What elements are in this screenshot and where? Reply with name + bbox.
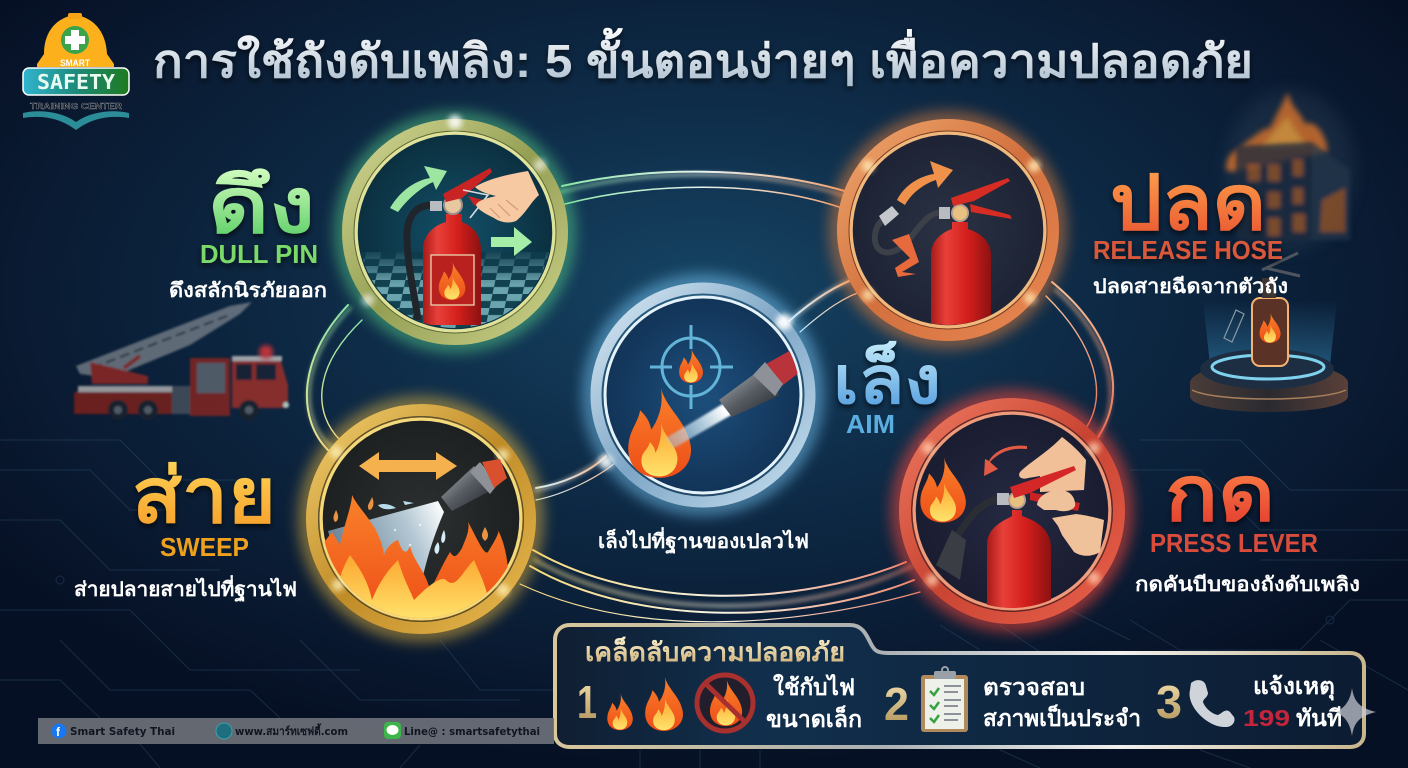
step: press lever (red) <box>900 399 1124 623</box>
website contact: www.สมาร์ทเซฟตี้.com <box>235 723 348 738</box>
english: DULL PIN: DULL PIN <box>200 239 318 269</box>
label: release <box>1093 161 1288 298</box>
website contact <box>216 723 348 739</box>
facebook contact: Smart Safety Thai <box>70 725 175 738</box>
tip 1: 1 <box>577 676 597 728</box>
checker floor <box>361 252 549 328</box>
decorative sparkle <box>1336 688 1376 736</box>
tip 3 <box>1156 673 1342 731</box>
label: aim <box>598 340 941 555</box>
tip 3: 3 <box>1156 676 1182 728</box>
safety banner: SAFETY <box>37 70 115 94</box>
icon: open book <box>23 111 129 130</box>
english: SWEEP: SWEEP <box>160 532 249 562</box>
heading: กด: กด <box>1165 452 1275 537</box>
facebook contact <box>52 724 175 739</box>
icon: large flame <box>628 388 691 478</box>
tip 2: สภาพเป็นประจำ <box>983 703 1141 731</box>
description: กดคันบีบของถังดับเพลิง <box>1135 573 1360 596</box>
icon: clipboard <box>921 667 968 732</box>
tip 1 <box>577 673 862 732</box>
tip 3: 199 <box>1243 705 1290 731</box>
logo: Smart Safety Training Center <box>23 13 129 130</box>
icon: hard hat: SMART <box>60 58 90 68</box>
icon: flame <box>920 458 966 522</box>
arrow: curved <box>390 166 447 212</box>
description: ส่ายปลายสายไปที่ฐานไฟ <box>74 574 297 603</box>
icon: nozzle hose <box>482 459 507 488</box>
arrow: straight <box>491 227 532 256</box>
icon: small flame <box>679 349 703 383</box>
arrow: double-headed <box>359 452 457 480</box>
icon: flames and spray <box>318 495 509 620</box>
ring <box>307 405 535 633</box>
label: press <box>1135 452 1360 596</box>
line contact <box>384 722 540 739</box>
label: sweep <box>74 454 297 603</box>
description: ปลดสายฉีดจากตัวถัง <box>1093 275 1288 298</box>
icon: nozzle and spray <box>666 350 800 448</box>
illustration: burning building <box>1225 90 1355 250</box>
step: aim (blue) <box>591 283 815 507</box>
english: PRESS LEVER: PRESS LEVER <box>1150 528 1318 558</box>
step: pull pin (green) <box>343 115 567 344</box>
icon: target crosshair <box>650 325 733 409</box>
line contact: Line@ : smartsafetythai <box>404 725 540 738</box>
description: ดึงสลักนิรภัยออก <box>169 280 327 302</box>
heading: ส่าย: ส่าย <box>132 454 276 539</box>
tip 1: ขนาดเล็ก <box>766 704 862 732</box>
tips heading: เคล็ดลับความปลอดภัย <box>585 636 845 667</box>
icon: nozzle <box>441 466 492 511</box>
illustration: hologram extinguisher on platform <box>1190 253 1348 412</box>
tip 1: ใช้กับไฟ <box>773 673 855 700</box>
arrow: curved <box>897 161 953 205</box>
icon: extinguisher with released hose <box>875 178 1012 330</box>
icon: big flame <box>645 677 683 731</box>
heading: เล็ง: เล็ง <box>833 340 941 417</box>
ring <box>343 115 567 344</box>
icon: extinguisher with hands <box>936 437 1104 610</box>
tip 3: แจ้งเหตุ <box>1253 673 1335 701</box>
icon: extinguisher with hand <box>407 168 539 325</box>
arrow: twisted <box>892 234 919 277</box>
tip 2 <box>884 667 1141 732</box>
illustration: fire truck <box>74 302 289 420</box>
title: การใช้ถังดับเพลิง: 5 ขั้นตอนง่ายๆ เพื่อความปลอดภัย <box>153 27 1253 87</box>
tip 2: 2 <box>884 678 909 730</box>
tip 3: ทันที <box>1296 705 1342 731</box>
heading: ปลด: ปลด <box>1110 161 1266 246</box>
icon: nozzle collar <box>470 462 498 494</box>
ring <box>591 283 815 507</box>
facebook contact: f <box>56 725 61 739</box>
tip 2: ตรวจสอบ <box>983 674 1085 700</box>
ring <box>838 120 1058 340</box>
step: release hose (orange) <box>838 120 1058 340</box>
panel: safety tips <box>555 625 1364 747</box>
label: pull <box>169 164 327 302</box>
connecting light lines <box>307 172 1113 622</box>
arrow: curved <box>984 446 1027 476</box>
ring <box>900 399 1124 623</box>
icon: prohibited flame <box>697 675 753 731</box>
english: RELEASE HOSE: RELEASE HOSE <box>1093 235 1283 265</box>
panel frame <box>555 625 1364 747</box>
description: เล็งไปที่ฐานของเปลวไฟ <box>598 526 809 555</box>
training center text: TRAINING CENTER <box>30 101 122 111</box>
heading: ดึง: ดึง <box>208 164 315 249</box>
icon: small flame <box>607 694 633 730</box>
english: AIM: AIM <box>846 409 895 439</box>
footer contact bar <box>38 718 554 744</box>
icon: telephone <box>1190 680 1235 727</box>
step: sweep (yellow) <box>307 405 535 633</box>
